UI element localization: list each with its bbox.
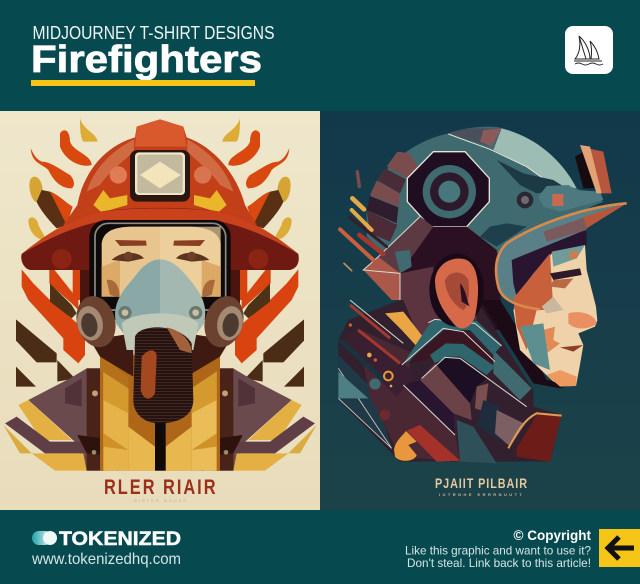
face (102, 227, 221, 297)
icon: midjourney sailboat (565, 26, 613, 74)
chest strap (87, 368, 103, 471)
bottom coat (517, 415, 562, 462)
brim (21, 208, 299, 270)
poster caption left: RLER RIAIR (104, 475, 216, 498)
helmet shield (130, 150, 190, 202)
shoulder (28, 368, 107, 471)
mask and hose (115, 259, 205, 423)
respirator ear cups (71, 291, 249, 352)
neck and ear area (363, 217, 502, 330)
orange and red blocks (385, 312, 460, 462)
octagon gear (407, 152, 489, 227)
ear (429, 253, 484, 328)
panel: right helmet profile poster (320, 111, 640, 510)
eyebrows (115, 240, 147, 246)
outlines and stripes (338, 300, 527, 448)
panel: left firefighter poster (0, 111, 320, 510)
copyright notice: Like this graphic and want to use it? (405, 544, 591, 558)
helmet badges (93, 190, 127, 212)
title: Firefighters (31, 39, 262, 81)
face (513, 245, 597, 387)
torso (90, 333, 230, 471)
face mask frame (89, 220, 231, 320)
poster small text left: RIRTER NOUSE (134, 498, 186, 503)
dots (349, 323, 393, 420)
helmet (21, 119, 299, 270)
flames (28, 118, 98, 240)
teal arches (403, 319, 502, 375)
hose (133, 327, 193, 423)
arrow box (599, 529, 640, 567)
helmet dome (367, 127, 603, 310)
header band (0, 0, 640, 110)
title underline (31, 80, 255, 86)
copyright notice (405, 544, 591, 570)
dark chevrons (16, 319, 75, 387)
logo mark (32, 531, 57, 545)
poster small text right: IUTRNHE ERRRNUUTT (439, 492, 523, 497)
helmet details (497, 145, 612, 212)
brand name: TOKENIZED (59, 528, 181, 550)
visor and face (496, 203, 627, 387)
subtitle: MIDJOURNEY T-SHIRT DESIGNS (32, 23, 274, 43)
website url: www.tokenizedhq.com (31, 551, 181, 568)
streaks (340, 172, 387, 271)
mechanical body (338, 300, 577, 463)
brown strap (50, 283, 77, 318)
eyes (112, 253, 144, 262)
red straps (22, 263, 85, 363)
teal triangle (338, 372, 368, 398)
poster caption right: PJAIIT PILBAIR (435, 476, 527, 491)
copyright heading: © Copyright (514, 528, 591, 543)
mirrored half: flames, chevrons, shoulders (3, 118, 118, 471)
copyright notice: Don't steal. Link back to this article! (407, 556, 591, 570)
footer band (0, 510, 640, 584)
